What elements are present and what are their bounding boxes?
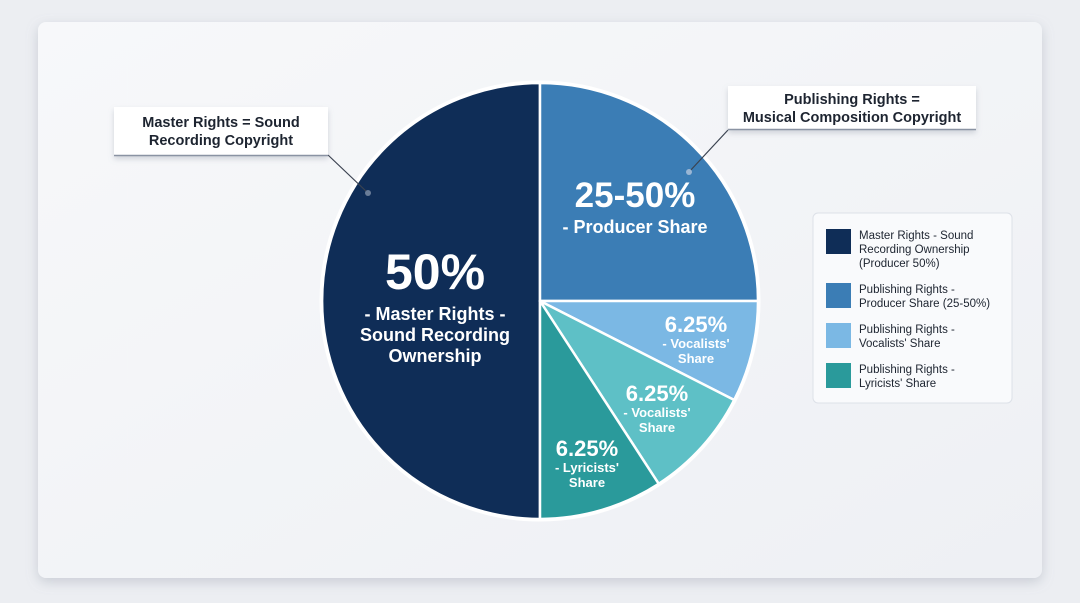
label: 50% master: 50% [385,244,485,300]
legend item: master: Recording Ownership [859,244,970,256]
legend item: vocalists: Publishing Rights - [859,324,955,336]
legend item: lyricists: Publishing Rights - [859,364,955,376]
legend item: producer: Publishing Rights - [859,284,955,296]
label: 50% master [360,244,510,366]
legend item: producer: Producer Share (25-50%) [859,298,990,310]
legend item: lyricists: Lyricists' Share [859,378,936,390]
label: lyricists: Share [569,475,605,490]
slice: master rights 50% [322,83,540,519]
label: vocalists 2: - Vocalists' [623,405,691,420]
label: lyricists: - Lyricists' [555,460,619,475]
callout: publishing rights: Musical Composition Copyright [743,110,961,126]
label: lyricists: 6.25% [556,436,618,461]
callout: publishing rights [686,86,976,175]
legend item: master: (Producer 50%) [859,258,940,270]
legend [813,213,1012,403]
legend item: vocalists: Vocalists' Share [859,338,940,350]
legend item: master [826,229,973,270]
label: 25-50% producer [562,176,708,237]
label: vocalists 1: - Vocalists' [662,336,730,351]
slice: lyricists share [540,301,659,519]
legend item: vocalists [826,323,955,350]
slice: vocalists share 1 [540,301,758,400]
slice: producer share [540,83,758,301]
label: vocalists 2: Share [639,420,675,435]
label: vocalists 2: 6.25% [626,381,688,406]
pie chart [322,83,758,519]
label: 50% master: Ownership [388,346,482,366]
legend item: lyricists [826,363,955,390]
label: 50% master: Sound Recording [360,325,510,345]
label: vocalists 1: Share [678,351,714,366]
callout: publishing rights: Publishing Rights = [784,92,920,108]
label: 25-50% producer: - Producer Share [562,217,708,237]
label: 25-50% producer: 25-50% [575,176,695,215]
label: vocalists 2 [623,381,691,435]
slice: vocalists share 2 [540,301,734,484]
callout: master rights [114,107,371,196]
pie outer ring [321,82,759,520]
label: lyricists [555,436,619,490]
label: vocalists 1 [662,312,730,366]
label: vocalists 1: 6.25% [665,312,727,337]
legend item: producer [826,283,990,310]
label: 50% master: - Master Rights - [364,304,506,324]
callout: master rights: Master Rights = Sound [142,115,300,131]
callout: master rights: Recording Copyright [149,133,293,149]
legend item: master: Master Rights - Sound [859,230,973,242]
